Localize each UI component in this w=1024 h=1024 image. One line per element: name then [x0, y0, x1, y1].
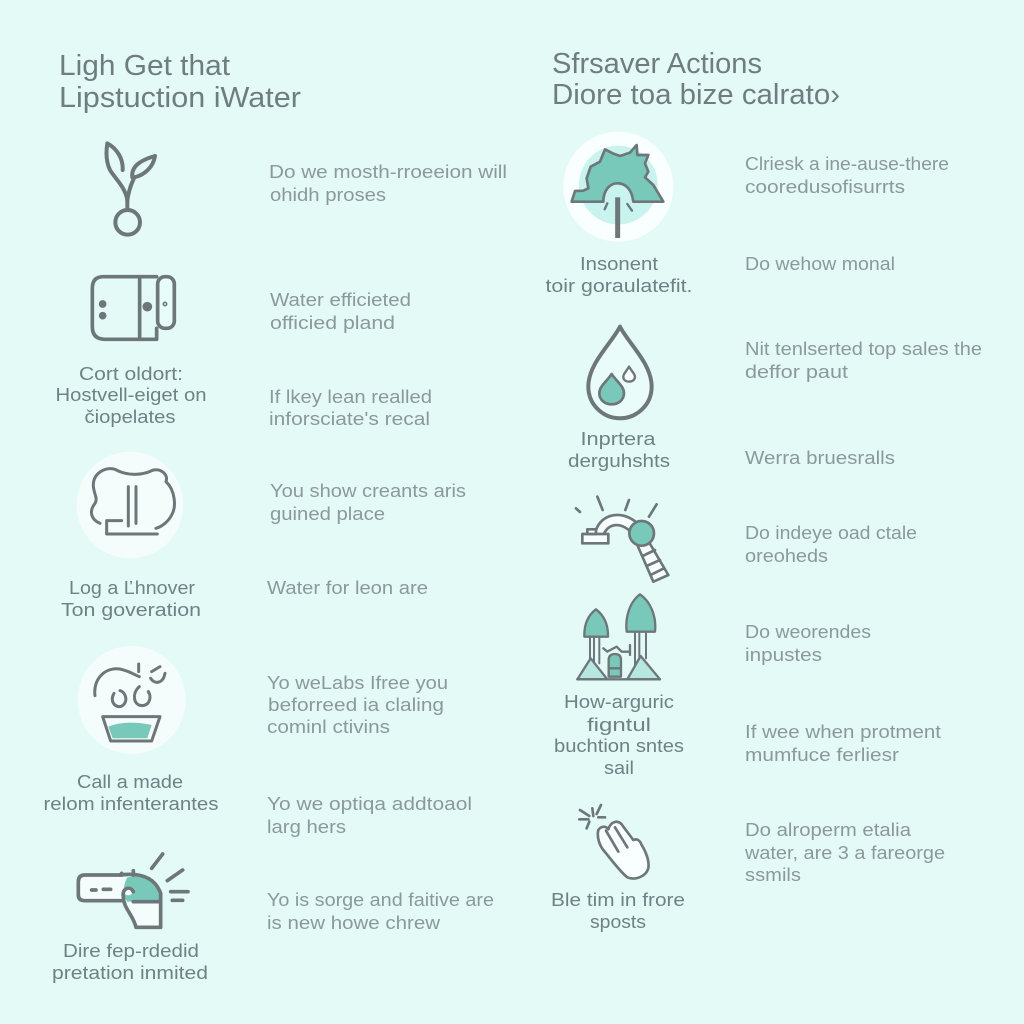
left column descriptions: beforreed ia claling: [268, 695, 444, 715]
icon: shrub over arch: [563, 132, 673, 242]
right column descriptions: water, are 3 a fareorge: [744, 843, 945, 863]
label: dire feg-rdedid: Dire fep-rdedid: [63, 941, 199, 961]
label: call a made: [44, 772, 219, 814]
right column descriptions: If wee when protment: [745, 722, 941, 742]
right column descriptions: [744, 154, 982, 885]
left column descriptions: [267, 162, 507, 933]
label: inprtera: derguhshts: [568, 451, 670, 471]
label: cort oldort: Cort oldort:: [79, 364, 183, 384]
left column descriptions: You show creants aris: [270, 481, 466, 501]
right column descriptions: oreoheds: [745, 546, 828, 566]
right column descriptions: Werra bruesralls: [745, 448, 895, 468]
icon: shower arm: [576, 497, 668, 582]
left column descriptions: Yo weLabs Ifree you: [267, 673, 448, 693]
icon: water drop: [588, 327, 652, 418]
right column descriptions: Nit tenlserted top sales the: [745, 339, 982, 359]
label: how-arguric: [554, 692, 684, 778]
left column descriptions: guined place: [270, 504, 385, 524]
label: insonent: toir goraulatefit.: [546, 276, 692, 296]
right column descriptions: Do wehow monal: [745, 254, 895, 274]
label: dire feg-rdedid: pretation inmited: [52, 963, 208, 983]
left column descriptions: If lkey lean realled: [269, 387, 432, 407]
left column descriptions: Do we mosth-rroeeion will: [269, 162, 507, 182]
label: inprtera: [568, 429, 670, 471]
left column descriptions: officied pland: [270, 313, 395, 333]
left heading: [59, 50, 301, 114]
label: log a thnover: [61, 578, 201, 620]
icon: hand: [579, 805, 649, 878]
label: inprtera: Inprtera: [580, 429, 657, 449]
right heading: Sfrsaver Actions: [552, 48, 762, 80]
left heading: Ligh Get that: [59, 50, 230, 82]
icon: bowl with drops: [78, 646, 186, 754]
right heading: [552, 48, 840, 111]
label: call a made: relom infenterantes: [44, 794, 219, 814]
label: how-arguric: figntul: [587, 715, 651, 735]
left column descriptions: Water for leon are: [267, 578, 428, 598]
label: call a made: Call a made: [77, 772, 183, 792]
label: cort oldort: čiopelates: [84, 407, 176, 427]
icon: hand on device: [78, 854, 188, 927]
right column descriptions: Do weorendes: [745, 622, 871, 642]
right column descriptions: Do indeye oad ctale: [745, 523, 917, 543]
right column descriptions: ssmils: [745, 865, 801, 885]
label: how-arguric: sail: [604, 758, 634, 778]
right heading: Diore toa bize calrato›: [552, 79, 840, 111]
left column descriptions: Yo we optiqa addtoaol: [267, 794, 472, 814]
label: ble tim: sposts: [590, 912, 646, 932]
label: how-arguric: How-arguric: [564, 692, 674, 712]
label: log a thnover: Log a Ľhnover: [69, 578, 195, 598]
label: insonent: Insonent: [580, 254, 658, 274]
label: log a thnover: Ton goveration: [61, 600, 201, 620]
left column descriptions: cominl ctivins: [267, 717, 390, 737]
left column descriptions: larg hers: [267, 817, 346, 837]
right column descriptions: Do alroperm etalia: [745, 820, 912, 840]
left heading: Lipstuction iWater: [59, 82, 301, 114]
left column descriptions: ohidh proses: [270, 185, 386, 205]
icon: cloud in circle: [77, 452, 183, 558]
right column descriptions: cooredusofisurrts: [745, 177, 905, 197]
icon: door panel: [92, 277, 174, 339]
right column descriptions: Clriesk a ine-ause-there: [745, 154, 949, 174]
left column descriptions: Yo is sorge and faitive are: [267, 890, 494, 910]
left column descriptions: Water efficieted: [270, 290, 411, 310]
left column descriptions: inforsciate's recal: [269, 409, 430, 429]
label: how-arguric: buchtion sntes: [554, 736, 684, 756]
right column descriptions: deffor paut: [745, 362, 848, 382]
label: ble tim: Ble tim in frore: [551, 890, 685, 910]
right column descriptions: inpustes: [745, 645, 822, 665]
label: insonent: [546, 254, 692, 296]
label: cort oldort: Hostvell-eiget on: [56, 385, 206, 405]
icon: towers: [577, 594, 660, 679]
icon: sprout: [107, 143, 155, 235]
left column descriptions: is new howe chrew: [267, 913, 441, 933]
label: cort oldort: [56, 364, 206, 427]
right column descriptions: mumfuce ferliesr: [745, 745, 899, 765]
label: dire feg-rdedid: [52, 941, 208, 983]
label: ble tim: [551, 890, 685, 932]
